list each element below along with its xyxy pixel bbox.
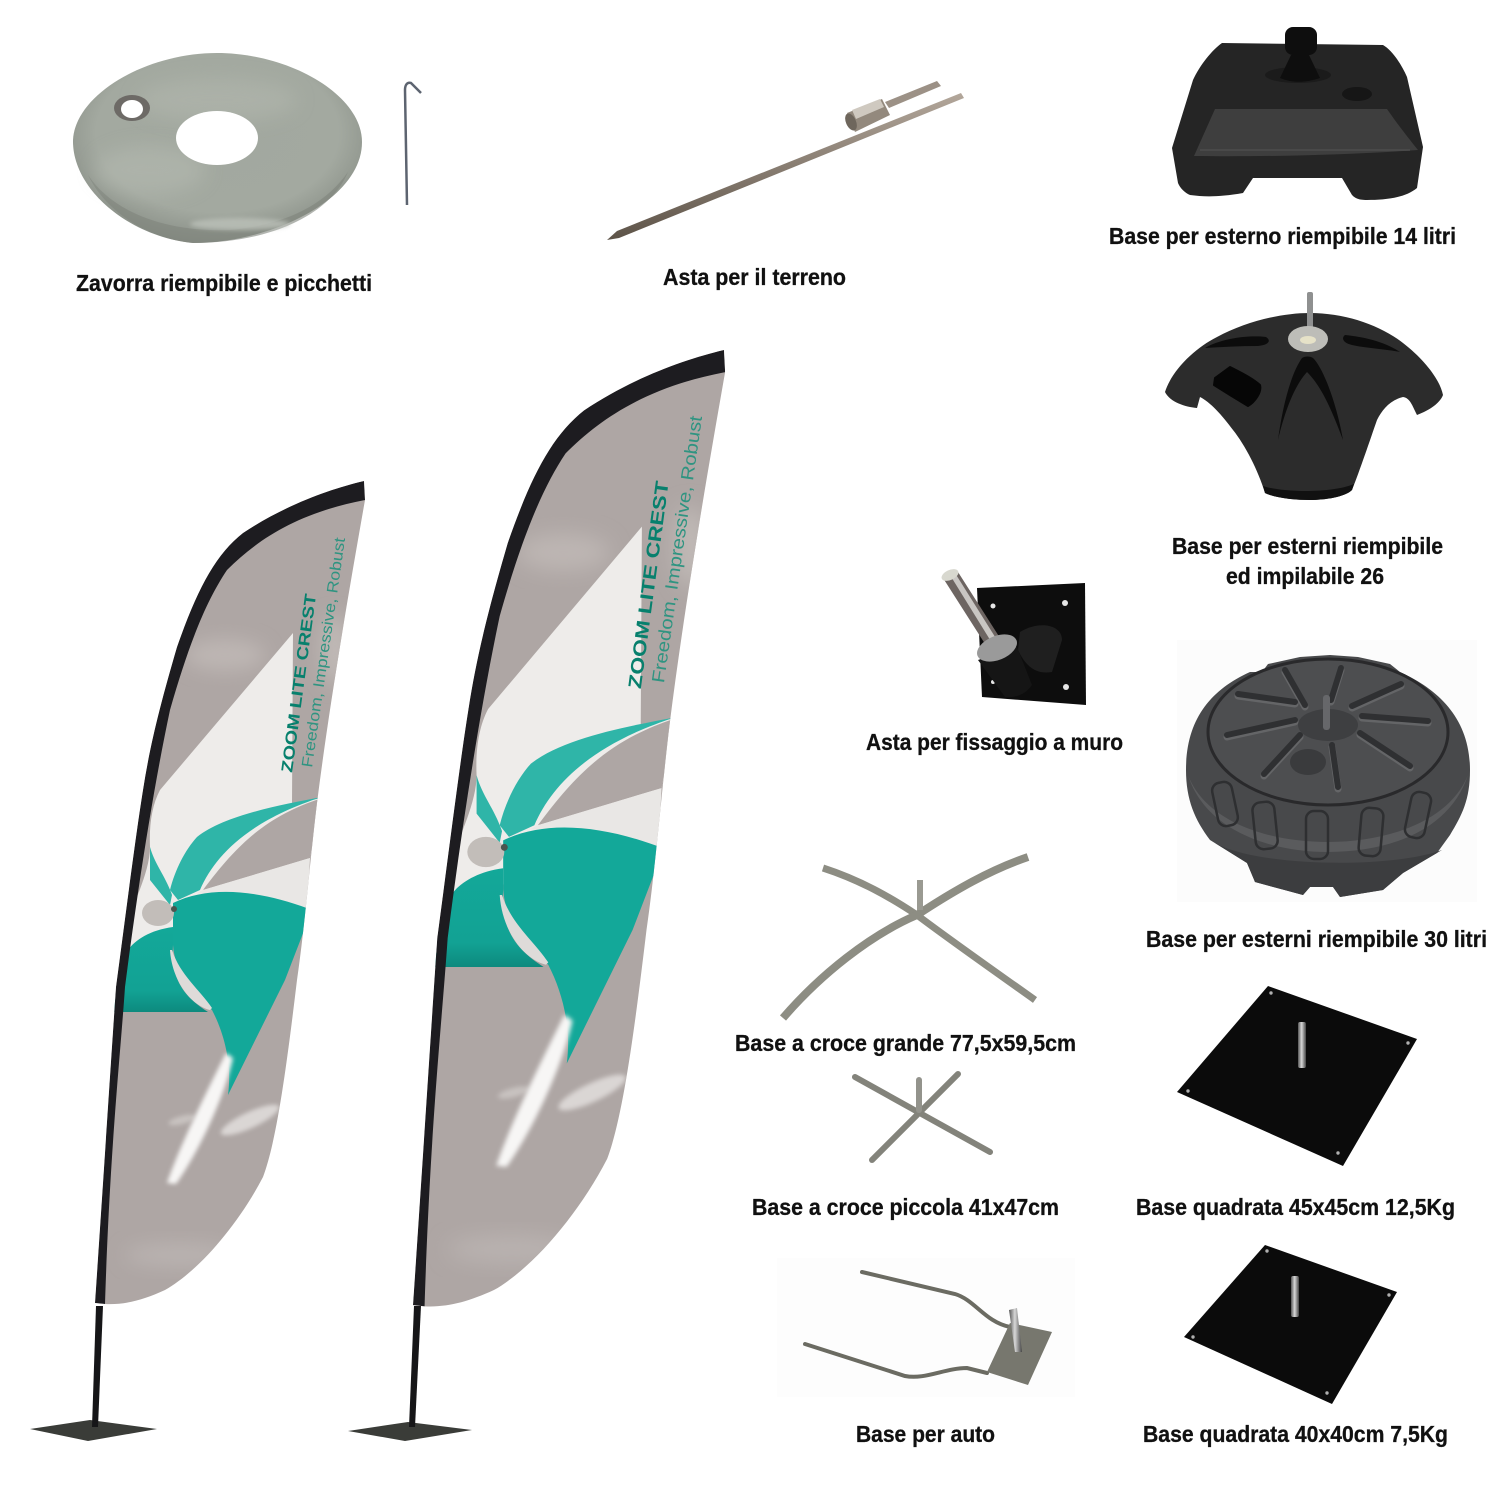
label: small cross base: Base a croce piccola 41x47cm bbox=[752, 1194, 1059, 1220]
large flag with pole and base bbox=[348, 343, 737, 1441]
flag pole bbox=[409, 1306, 421, 1427]
flag text bbox=[279, 536, 349, 774]
label: stackable base bbox=[1172, 533, 1443, 589]
icon: large cross base bbox=[783, 857, 1035, 1018]
flag text: Freedom, Impressive, Robust bbox=[648, 414, 706, 684]
label: stackable base: Base per esterni riempibile bbox=[1172, 533, 1443, 559]
label: ground spike: Asta per il terreno bbox=[663, 264, 846, 290]
icon: ground peg bbox=[405, 83, 421, 205]
icon: stackable base bbox=[1165, 292, 1443, 500]
small flag with pole and base bbox=[30, 475, 375, 1441]
label: 14 litre base: Base per esterno riempibile 14 litri bbox=[1109, 223, 1456, 249]
flag fabric bbox=[407, 343, 737, 1313]
label: wall mount: Asta per fissaggio a muro bbox=[866, 729, 1123, 755]
label: ballast: Zavorra riempibile e picchetti bbox=[76, 270, 372, 296]
flag text: ZOOM LITE CREST bbox=[624, 479, 673, 690]
icon: car base bbox=[777, 1258, 1075, 1397]
label: 45 cm square base: Base quadrata 45x45cm 12,5Kg bbox=[1136, 1194, 1455, 1220]
flag base plate bbox=[348, 1422, 472, 1441]
icon: 40 cm square base bbox=[1184, 1245, 1397, 1404]
flag fabric bbox=[90, 475, 375, 1310]
icon: 45 cm square base bbox=[1177, 986, 1417, 1166]
label: large cross base: Base a croce grande 77,5x59,5cm bbox=[735, 1030, 1076, 1056]
flag text bbox=[624, 414, 706, 690]
flag text: ZOOM LITE CREST bbox=[279, 593, 320, 774]
icon: wall mount bbox=[940, 567, 1086, 705]
icon: 14 litre base bbox=[1172, 27, 1423, 200]
icon: water-fillable ring ballast bbox=[73, 53, 362, 243]
flag pole bbox=[92, 1306, 103, 1427]
label: stackable base: ed impilabile 26 bbox=[1226, 563, 1384, 589]
icon: 30 litre wheel base bbox=[1177, 640, 1477, 902]
flag base plate bbox=[30, 1420, 157, 1441]
icon: small cross base bbox=[855, 1074, 990, 1160]
label: 40 cm square base: Base quadrata 40x40cm 7,5Kg bbox=[1143, 1421, 1448, 1447]
flag text: Freedom, Impressive, Robust bbox=[299, 536, 349, 769]
icon: ground spike bbox=[607, 81, 964, 240]
label: car base: Base per auto bbox=[856, 1421, 995, 1447]
